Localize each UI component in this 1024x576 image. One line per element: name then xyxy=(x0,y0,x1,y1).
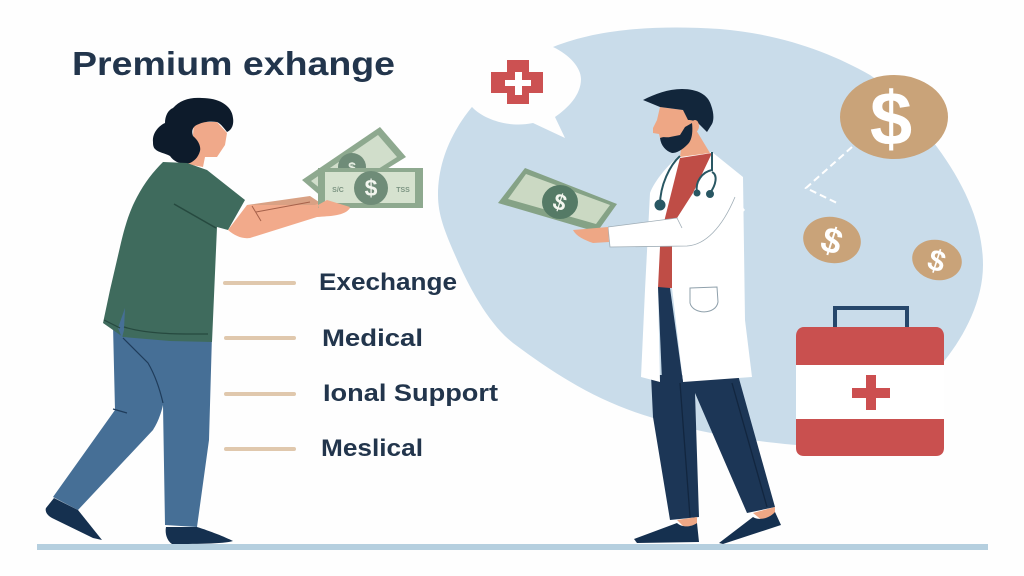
medical cross xyxy=(491,60,543,104)
banknotes held by patient: TSS xyxy=(396,187,410,194)
kit body xyxy=(796,327,944,365)
patient hair xyxy=(153,98,233,164)
ground line xyxy=(37,544,988,550)
connector line: meslical xyxy=(224,447,296,451)
small coin right xyxy=(908,235,966,285)
banknotes held by patient xyxy=(302,127,423,215)
doctor figure xyxy=(608,89,781,544)
kit cross xyxy=(852,375,890,410)
list: labels with connector lines xyxy=(223,269,498,462)
connector line: support xyxy=(224,392,296,396)
patient shoes xyxy=(46,498,102,540)
doctor arm xyxy=(608,197,745,247)
doctor hair xyxy=(643,89,713,132)
kit handle xyxy=(835,308,907,328)
label: exchange: Exechange xyxy=(319,269,457,296)
large coin: $ xyxy=(870,77,912,162)
banknotes held by patient: S/C xyxy=(332,187,344,194)
small coin left: $ xyxy=(816,218,848,263)
small coin right: $ xyxy=(924,243,950,280)
connector line: medical xyxy=(224,336,296,340)
doctor neck and head xyxy=(680,125,710,157)
patient neck and face xyxy=(187,122,227,167)
banknotes held by patient: $ xyxy=(348,159,356,175)
banknote held by doctor: $ xyxy=(550,188,570,216)
label: support: Ional Support xyxy=(323,380,498,407)
title: Premium exhange xyxy=(72,45,395,82)
speech bubble xyxy=(461,39,581,138)
rear banknote xyxy=(302,127,406,204)
patient front arm xyxy=(228,200,350,238)
doctor legs xyxy=(651,375,775,520)
small coin left xyxy=(799,212,865,268)
patient rear arm xyxy=(247,196,325,222)
stethoscope xyxy=(656,152,716,210)
patient fingers xyxy=(318,200,350,215)
background blob xyxy=(438,27,983,445)
label: medical: Medical xyxy=(322,325,423,352)
connector line: exchange xyxy=(223,281,296,285)
banknote held by doctor xyxy=(498,168,617,232)
doctor ear xyxy=(691,120,699,132)
first aid kit xyxy=(796,308,944,456)
patient figure xyxy=(46,98,350,544)
dashed connector from large coin xyxy=(806,147,852,203)
doctor ankles xyxy=(677,507,775,528)
doctor shoes xyxy=(634,523,699,543)
patient shirt xyxy=(103,162,245,342)
patient legs xyxy=(53,325,212,527)
coat pocket xyxy=(690,287,718,312)
doctor beard xyxy=(660,123,692,153)
doctor lab coat xyxy=(641,152,752,382)
speech bubble with medical cross xyxy=(461,39,581,138)
doctor hand xyxy=(573,227,609,243)
doctor shirt xyxy=(658,153,712,288)
doctor trousers under coat xyxy=(658,287,683,382)
label: meslical: Meslical xyxy=(321,435,423,462)
front banknote xyxy=(318,168,423,208)
banknotes held by patient: $ xyxy=(365,175,378,201)
large coin xyxy=(840,75,948,162)
